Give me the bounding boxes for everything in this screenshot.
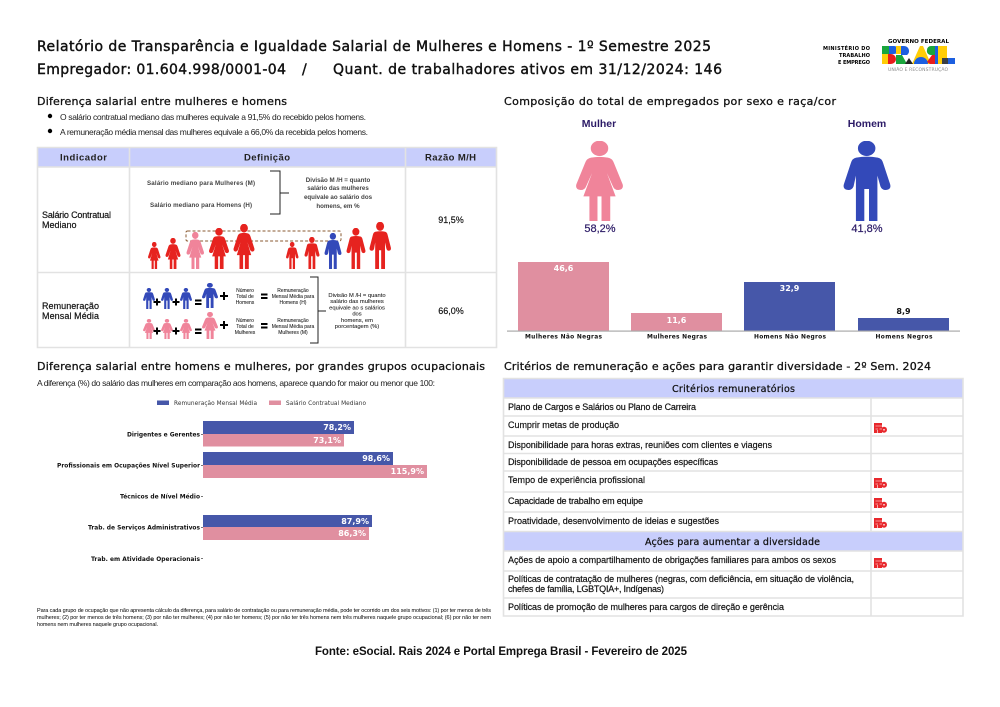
definition: divisão xyxy=(304,177,373,210)
logo: ministério xyxy=(823,44,870,66)
text: divisão: porcentagem (%) xyxy=(335,324,379,330)
text: divisão: Divisão M /H = quanto xyxy=(328,293,386,299)
definition: divisão: homens, em % xyxy=(316,203,360,210)
logo: governo federal brasil: UNIÃO E RECONSTRUÇÃO xyxy=(888,66,948,73)
list: critérios: Disponibilidade de pessoa em ocupações específicas xyxy=(508,457,718,467)
icons: homens xyxy=(286,222,391,269)
bar chart: grupos ocupacionais: Trab. de Serviços Administrativos xyxy=(88,526,200,532)
logo: governo federal brasil: GOVERNO FEDERAL xyxy=(888,39,949,45)
title: Quant. de trabalhadores ativos em 31/12/2024: 146 xyxy=(333,62,722,78)
list: critérios xyxy=(508,402,772,526)
table header: Indicador xyxy=(60,152,107,164)
bar chart: raça/cor: Mulheres Negras xyxy=(647,334,707,340)
logo: ministério: MINISTÉRIO DO xyxy=(823,44,870,52)
panel: mulher xyxy=(576,118,623,235)
heading: composição: Composição do total de empregados por sexo e raça/cor xyxy=(504,95,836,108)
indicator: remuneração mensal média, linha 2: Mensal Média xyxy=(42,311,99,321)
bar chart: raça/cor: Homens Negros xyxy=(876,334,933,340)
value: 66,0%: 66,0% xyxy=(438,306,464,316)
panel: tabela de critérios xyxy=(504,378,963,616)
text: número total de homens: Número xyxy=(236,288,254,294)
title: / xyxy=(302,62,307,78)
icons: mulheres xyxy=(148,224,254,269)
bar chart: grupos ocupacionais: 78,2% xyxy=(323,423,351,432)
text: número total de homens: Total de xyxy=(236,294,254,300)
text: número total de mulheres: Número xyxy=(236,318,254,324)
text: remuneração mulheres: Remuneração xyxy=(277,318,309,324)
footnote: mulheres; (2) por ter menos de três homens; (3) por não ter mulheres; (4) por não ter homens; (5) por não ter três homens nem três mulheres naquele grupo ocupacional; (6) por não ter nem xyxy=(37,615,491,621)
subheading: A diferença (%) do salário das mulheres em comparação aos homens, aparece quando for maior ou menor que 100: xyxy=(37,378,435,388)
bar chart: grupos ocupacionais: Técnicos de Nível Médio xyxy=(120,494,200,500)
heading: diferença salarial: Diferença salarial entre mulheres e homens xyxy=(37,95,287,108)
text: remuneração mulheres: Mensal Média para xyxy=(272,324,314,330)
legend xyxy=(157,400,366,407)
definition text: salário mediano xyxy=(147,180,255,209)
text: divisão: dos xyxy=(352,312,362,318)
logo: governo federal brasil xyxy=(882,39,955,73)
icons: equação homens xyxy=(143,283,268,309)
list: ações xyxy=(508,555,854,612)
indicator: salário contratual mediano, linha 2: Mediano xyxy=(42,220,77,230)
text: divisão: equivale ao s salários xyxy=(329,305,385,311)
bar chart: raça/cor: 11,6 xyxy=(667,316,687,325)
bar chart: grupos ocupacionais: Profissionais em Ocupações Nível Superior xyxy=(57,462,200,470)
logo: ministério: E EMPREGO xyxy=(838,60,870,66)
list: critérios: Plano de Cargos e Salários ou Plano de Carreira xyxy=(508,402,696,412)
list: ações: Ações de apoio a compartilhamento de obrigações familiares para ambos os sexos xyxy=(508,555,836,565)
bar chart: raça/cor: 32,9 xyxy=(780,284,800,293)
title xyxy=(37,39,722,78)
bar chart: grupos ocupacionais xyxy=(57,421,427,563)
list: critérios: Cumprir metas de produção xyxy=(508,420,619,430)
table heading: critérios remuneratórios: Critérios remuneratórios xyxy=(672,384,795,395)
definition text: salário mediano: Salário mediano para Mulheres (M) xyxy=(147,180,255,187)
bullets: O salário contratual mediano das mulheres equivale a 91,5% do recebido pelos homens. xyxy=(60,112,366,122)
legend: Remuneração Mensal Média xyxy=(174,400,257,407)
panel: homem: 41,8% xyxy=(851,223,883,235)
legend: Salário Contratual Mediano xyxy=(286,400,366,407)
list: critérios: Capacidade de trabalho em equipe xyxy=(508,496,643,506)
bar chart: raça/cor: 8,9 xyxy=(896,307,911,316)
list: critérios: Proatividade, desenvolvimento de ideias e sugestões xyxy=(508,516,720,526)
bar chart: raça/cor: Homens Não Negros xyxy=(754,334,826,340)
panel: homem: Homem xyxy=(848,118,886,130)
dashed highlight xyxy=(186,231,341,241)
table header xyxy=(60,152,476,164)
panel: mulher: 58,2% xyxy=(584,223,616,235)
indicator: remuneração mensal média: Remuneração xyxy=(42,301,99,311)
panel: mulher: Mulher xyxy=(582,118,616,130)
list: critérios: Tempo de experiência profissional xyxy=(508,475,645,485)
footnote: Para cada grupo de ocupação que não apresenta cálculo da diferença, para salário de contratação ou para remuneração média, pode ter ocorrido um dos seis motivos: (1) por ter menos de três xyxy=(37,608,491,614)
bullets: A remuneração média mensal das mulheres equivale a 66,0% da recebida pelos homens. xyxy=(60,127,368,137)
list: critérios: Disponibilidade para horas extras, reuniões com clientes e viagens xyxy=(508,440,772,450)
logo: ministério: TRABALHO xyxy=(839,53,870,59)
text: remuneração homens: Mensal Média para xyxy=(272,294,314,300)
bar chart: raça/cor: Mulheres Não Negras xyxy=(525,334,602,340)
bar chart: grupos ocupacionais: 86,3% xyxy=(338,529,366,538)
value: 91,5%: 91,5% xyxy=(438,215,464,225)
icons: equação mulheres xyxy=(143,312,268,339)
bullets xyxy=(48,112,368,137)
bracket xyxy=(270,171,289,214)
text: número total de mulheres: Total de xyxy=(236,324,254,330)
definition: divisão: Divisão M /H = quanto xyxy=(306,177,370,184)
panel: homem xyxy=(844,118,890,235)
definition: divisão: equivale ao salário dos xyxy=(304,194,373,201)
list: ações: Políticas de contratação de mulheres (negras, com deficiência, em situação de violência, xyxy=(508,574,854,584)
bar chart: raça/cor: 46,6 xyxy=(554,264,574,273)
list: ações: chefes de família, LGBTQIA+, Indígenas) xyxy=(508,584,664,594)
bracket xyxy=(310,277,326,343)
title: Relatório de Transparência e Igualdade Salarial de Mulheres e Homens - 1º Semestre 2025 xyxy=(37,39,711,55)
panel: tabela de indicadores xyxy=(38,148,496,348)
bar chart: grupos ocupacionais: 87,9% xyxy=(341,517,369,526)
text: divisão: homens, em xyxy=(341,318,373,324)
indicator: salário contratual mediano: Salário Contratual xyxy=(42,210,111,220)
table header: Razão M/H xyxy=(425,152,476,164)
text: remuneração mulheres: Mulheres (M) xyxy=(278,330,308,336)
bar chart: raça/cor xyxy=(507,262,960,340)
bar chart: grupos ocupacionais: 98,6% xyxy=(362,454,390,463)
source: Fonte: eSocial. Rais 2024 e Portal Emprega Brasil - Fevereiro de 2025 xyxy=(315,646,688,658)
bar chart: grupos ocupacionais: 73,1% xyxy=(313,436,341,445)
title: Empregador: 01.604.998/0001-04 xyxy=(37,62,286,78)
heading: critérios: Critérios de remuneração e ações para garantir diversidade - 2º Sem. 2024 xyxy=(504,360,931,373)
definition text: salário mediano: Salário mediano para Homens (H) xyxy=(150,202,252,209)
bar chart: grupos ocupacionais: Dirigentes e Gerentes xyxy=(127,432,200,438)
table heading: ações: Ações para aumentar a diversidade xyxy=(645,537,820,548)
list: ações: Políticas de promoção de mulheres para cargos de direção e gerência xyxy=(508,602,784,612)
text: remuneração homens: Remuneração xyxy=(277,288,309,294)
table header: Definição xyxy=(244,152,290,164)
text: número total de homens: Homens xyxy=(236,300,255,306)
footnote xyxy=(37,608,491,628)
icons: marcações xyxy=(874,423,887,568)
text: remuneração homens: Homens (H) xyxy=(280,300,307,306)
text: divisão: salário das mulheres xyxy=(330,299,384,305)
heading: grupos ocupacionais: Diferença salarial entre homens e mulheres, por grandes grupos ocupacionais xyxy=(37,360,485,373)
bar chart: grupos ocupacionais: Trab. em Atividade Operacionais xyxy=(91,557,200,563)
bar chart: grupos ocupacionais: 115,9% xyxy=(391,467,424,476)
definition: divisão: salário das mulheres xyxy=(307,185,369,192)
footnote: homens nem mulheres naquele grupo ocupacional. xyxy=(37,622,158,628)
text: número total de mulheres: Mulheres xyxy=(235,330,256,336)
